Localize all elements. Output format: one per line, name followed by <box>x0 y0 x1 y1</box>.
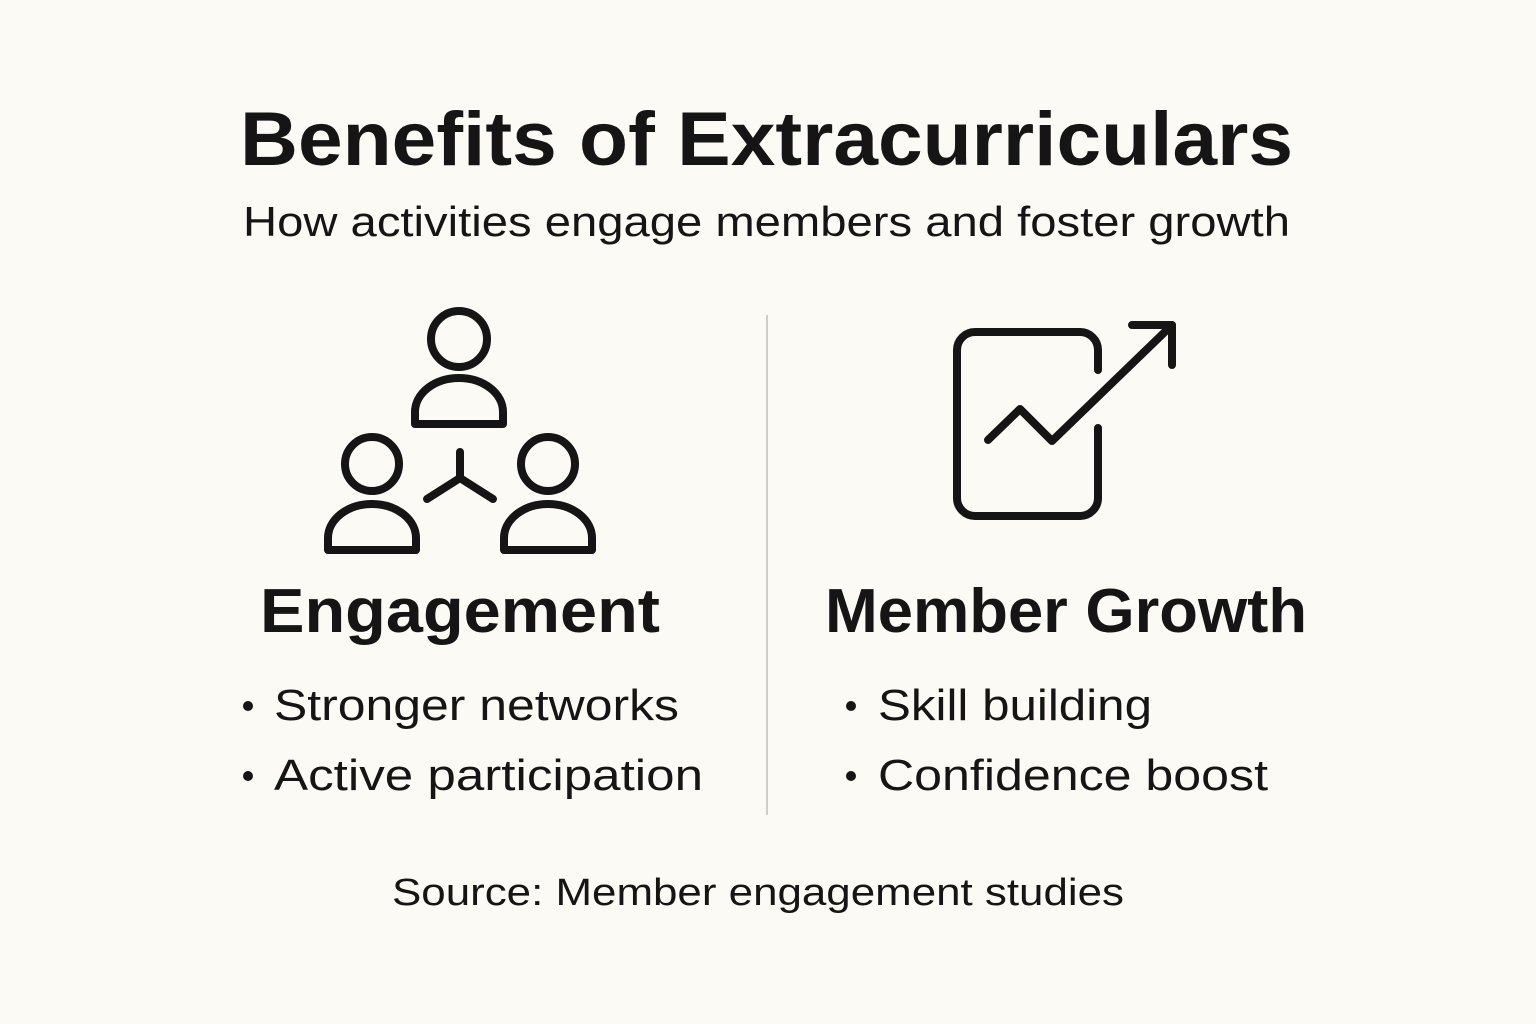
heading: engagement: Engagement <box>260 577 660 646</box>
list: growth: Confidence boost <box>878 751 1268 800</box>
icon: people network <box>328 311 592 550</box>
title: Benefits of Extracurriculars <box>240 97 1293 182</box>
list: growth <box>846 681 1268 800</box>
list: engagement: Active participation <box>274 751 703 800</box>
subtitle: How activities engage members and foster growth <box>243 198 1290 245</box>
icon: growth chart <box>957 325 1172 516</box>
list: engagement <box>243 681 703 800</box>
list: engagement: Stronger networks <box>274 681 679 730</box>
source: Source: Member engagement studies <box>392 872 1124 914</box>
list: growth: Skill building <box>878 681 1152 730</box>
heading: member growth: Member Growth <box>825 577 1307 646</box>
